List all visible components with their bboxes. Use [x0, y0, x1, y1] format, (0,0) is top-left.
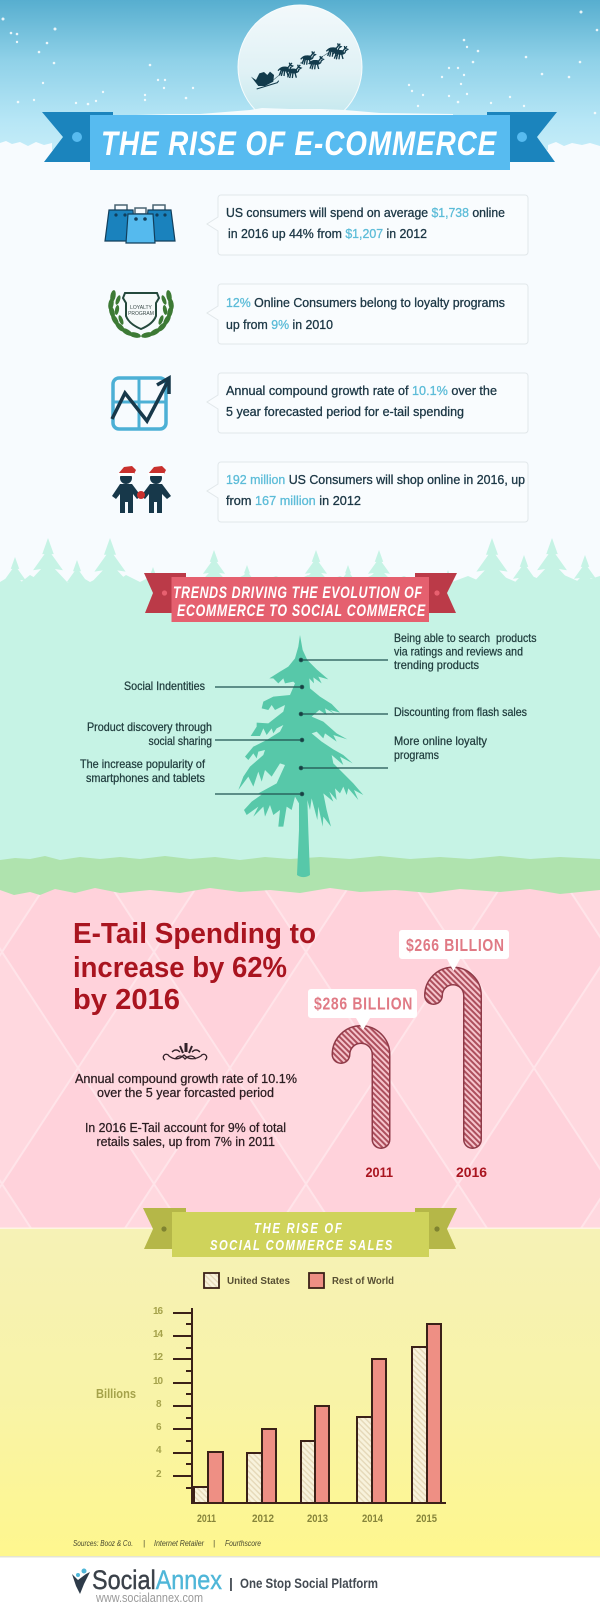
banner right tail	[487, 112, 557, 162]
label: smartphones	[80, 757, 206, 785]
social commerce banner: SOCIAL COMMERCE SALES	[210, 1236, 392, 1253]
panel: fact 3: 5 year forecasted period for e-tail spending	[226, 404, 464, 419]
banner right tail	[415, 1208, 457, 1249]
legend	[204, 1273, 394, 1288]
x axis years	[197, 1513, 437, 1525]
bars	[194, 1324, 441, 1503]
axes and ticks	[173, 1308, 446, 1503]
moon	[238, 5, 362, 129]
icon: socialannex logo	[72, 1568, 90, 1594]
yellow section background	[0, 1228, 600, 1556]
banner left tail	[143, 1208, 186, 1249]
cane 2016	[434, 976, 472, 1140]
label: loyalty programs: programs	[394, 748, 439, 762]
year labels: 2011	[366, 1164, 393, 1180]
sources: Internet Retailer	[154, 1539, 204, 1548]
label: ratings and reviews: via ratings and reviews and	[394, 644, 523, 658]
snow drift on banner	[136, 108, 453, 118]
label: product discovery: social sharing	[148, 734, 212, 748]
y axis values: 8	[156, 1399, 162, 1410]
y axis values: 2	[156, 1469, 162, 1480]
header sky	[0, 0, 600, 160]
footer: One Stop Social Platform	[240, 1575, 378, 1591]
y axis values: 12	[153, 1352, 163, 1363]
panel: fact 4	[207, 462, 528, 522]
x axis years: 2012	[252, 1513, 274, 1525]
axis label: Billions	[96, 1386, 136, 1401]
sources: |	[213, 1539, 215, 1548]
e-tail text: over the 5 year forcasted period	[97, 1086, 274, 1100]
panel: fact 4: 192 million US Consumers will shop online in 2016, up	[226, 472, 525, 487]
icon: shopping bags	[105, 205, 175, 243]
callout 2011	[308, 989, 417, 1030]
label: ratings and reviews: Being able to search products	[394, 631, 537, 645]
trends banner	[144, 573, 457, 622]
x axis years: 2015	[416, 1513, 437, 1525]
e-tail text: In 2016 E-Tail account for 9% of total	[85, 1121, 286, 1135]
banner right tail	[415, 573, 457, 613]
legend: United States	[227, 1275, 290, 1287]
icon: loyalty program laurel	[107, 290, 175, 339]
year labels: 2016	[456, 1164, 487, 1180]
trends banner: ECOMMERCE TO SOCIAL COMMERCE	[177, 602, 426, 621]
title: THE RISE OF E-COMMERCE	[101, 124, 497, 163]
heading: THE RISE OF	[254, 1219, 343, 1236]
url: www.socialannex.com	[95, 1591, 203, 1605]
bar chart	[96, 1306, 446, 1525]
icon: growth chart	[112, 378, 169, 429]
label: smartphones: The increase popularity of	[80, 757, 206, 771]
legend: Rest of World	[332, 1275, 394, 1287]
panel: fact 3	[207, 373, 528, 433]
sources: Sources: Booz & Co.	[73, 1539, 133, 1548]
y axis values: 14	[153, 1329, 163, 1340]
panel: fact 2: 12% Online Consumers belong to loyalty programs	[226, 295, 505, 310]
y axis values: 10	[153, 1376, 163, 1387]
e-tail heading	[73, 918, 316, 1016]
y axis values: 16	[153, 1306, 163, 1317]
y axis values	[153, 1306, 163, 1480]
label: loyalty programs	[394, 734, 487, 762]
e-tail text: retails sales, up from 7% in 2011	[96, 1135, 275, 1149]
callout 2011: $286 BILLION	[314, 995, 412, 1014]
cane 2011	[341, 1034, 381, 1140]
panel: fact 1	[207, 195, 528, 255]
banner left tail	[144, 573, 186, 613]
sources: Fourthscore	[225, 1539, 261, 1548]
e-tail heading: increase by 62%	[73, 952, 287, 984]
label: flash sales: Discounting from flash sales	[394, 705, 527, 719]
grass band	[0, 856, 600, 900]
label: ratings and reviews: trending products	[394, 658, 479, 672]
year labels	[366, 1164, 487, 1180]
snowflake dots	[2, 10, 598, 114]
label: social identities: Social Indentities	[124, 679, 205, 693]
label: product discovery: Product discovery through	[87, 720, 212, 734]
x axis years: 2014	[362, 1513, 384, 1525]
background pine forest	[0, 538, 600, 865]
label: loyalty programs: More online loyalty	[394, 734, 487, 748]
callout 2016	[399, 930, 509, 971]
callout 2016: $266 BILLION	[406, 937, 504, 955]
connector lines	[215, 658, 388, 796]
banner left tail	[42, 112, 113, 162]
pink section background	[0, 888, 600, 1229]
panel: fact 1: in 2016 up 44% from $1,207 in 2012	[228, 226, 427, 241]
sources	[73, 1539, 261, 1548]
panel: fact 4: from 167 million in 2012	[226, 493, 361, 508]
title banner	[42, 112, 557, 170]
e-tail heading: E-Tail Spending to	[73, 918, 316, 950]
panel: fact 1: US consumers will spend on average $1,738 online	[226, 205, 505, 220]
panel: fact 3: Annual compound growth rate of 10.1% over the	[226, 383, 497, 398]
e-tail text: Annual compound growth rate of 10.1%	[75, 1072, 297, 1086]
logo wordmark: SocialAnnex	[92, 1565, 222, 1595]
panel: fact 2	[207, 284, 528, 344]
x axis years: 2011	[197, 1513, 216, 1525]
label: ratings and reviews	[394, 631, 537, 672]
y axis values: 6	[156, 1422, 162, 1433]
social commerce banner	[143, 1208, 457, 1257]
icon: ornament	[163, 1043, 207, 1060]
e-tail text	[75, 1072, 297, 1149]
y axis values: 4	[156, 1445, 162, 1456]
label: smartphones: smartphones and tablets	[86, 771, 205, 785]
label: product discovery	[87, 720, 212, 748]
heading: TRENDS DRIVING THE EVOLUTION OF	[173, 584, 423, 603]
tagline: |	[229, 1575, 233, 1591]
candy cane chart	[308, 930, 509, 1180]
panel: fact 2: up from 9% in 2010	[226, 317, 333, 332]
icon: santa sleigh and reindeer	[251, 43, 348, 89]
icon: loyalty program laurel: LOYALTY	[130, 305, 153, 311]
x axis years: 2013	[307, 1513, 328, 1525]
sources: |	[143, 1539, 145, 1548]
tree	[238, 635, 363, 877]
tree diagram	[80, 631, 537, 877]
footer	[0, 1556, 600, 1607]
icon: couple in santa hats	[112, 466, 171, 513]
icon: loyalty program laurel: PROGRAM	[128, 311, 154, 317]
e-tail heading: by 2016	[73, 984, 180, 1016]
